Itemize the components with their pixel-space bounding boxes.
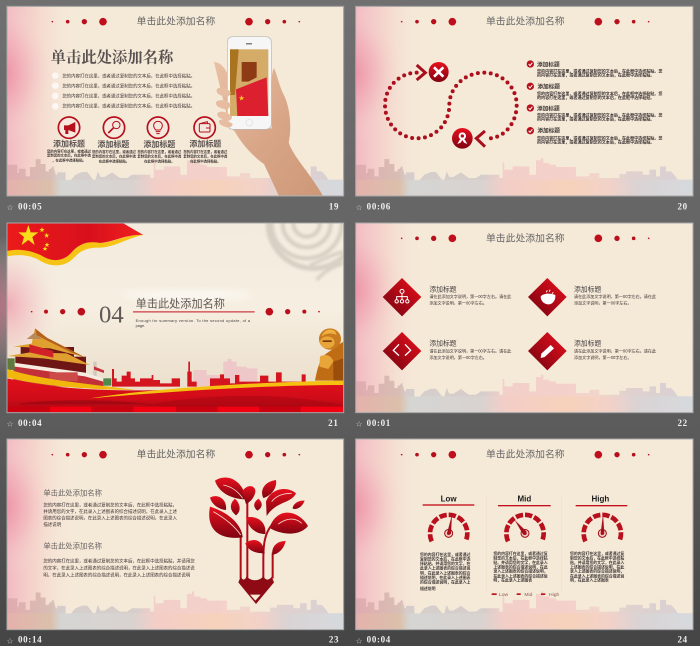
gauge column: mid: 录入上述图表的综合描述说明， xyxy=(493,569,548,574)
icon: megaphone xyxy=(58,117,80,138)
gauge column: mid: 您的内容打在这里，或者通过复 xyxy=(493,551,548,556)
text block 2: 您的内容打在这里，或者通过复制您的文本后，在此框中选择粘贴，并请用您 xyxy=(43,558,195,565)
feature column 2: 添加标题 xyxy=(97,139,129,149)
slide title: 单击此处添加名称 xyxy=(137,448,215,461)
feature: code: 请在此添加文字说明，第一00字左右。请在此 xyxy=(429,347,511,353)
red ribbons xyxy=(7,369,343,412)
slide frame xyxy=(7,223,344,413)
gauge column: high: 在此录入上述图表的综合描述说 xyxy=(570,573,624,578)
slide frame xyxy=(7,6,344,196)
footer timer: 00:05 xyxy=(18,201,42,211)
section subtitle xyxy=(136,319,251,328)
checklist: 您的内容打在这里，或者通过复制您的文本后，在此框中选择粘贴。 xyxy=(62,72,195,79)
footer timer: ☆ xyxy=(7,636,14,645)
icon: tools circle xyxy=(429,62,449,82)
feature column 3: 您的内容打在这里，或者通过 xyxy=(137,149,182,154)
list item 3: 您的内容打在这里，或者通过复制您的文本后，在此框中选择粘贴。您 xyxy=(537,112,662,118)
feature column 2: 复制您的文本后，在此框中选 xyxy=(92,153,137,158)
gauge column: high: 上述图表的综合描述说明，在此 xyxy=(570,564,624,569)
slide number: 20 xyxy=(677,201,688,211)
slide title: 单击此处添加名称 xyxy=(137,15,215,28)
feature column 2: 您的内容打在这里，或者通过 xyxy=(92,149,137,154)
checklist: 您的内容打在这里，或者通过复制您的文本后，在此框中选择粘贴。 xyxy=(62,103,195,110)
feature column 1: ，在此框中选择粘贴。 xyxy=(52,157,86,162)
icon: magnifier xyxy=(103,117,125,138)
slide header dots xyxy=(401,18,649,25)
hand holding phone xyxy=(214,37,323,195)
gauge column: high: 您的内容打在这里，或者通过复 xyxy=(570,551,624,556)
list item 1: 的内容打在这里，或者通过复制您的文本后，在此框中选择粘贴。 xyxy=(537,72,654,78)
legend: Low xyxy=(499,592,509,598)
text block 1: 您的内容打在这里，或者通过复制您的文本后，在此框中选择粘贴， xyxy=(43,501,177,508)
slide 22: diamond features xyxy=(293,220,693,429)
gauge column: low: 描述说明 xyxy=(420,586,436,591)
footer timer: 00:06 xyxy=(367,201,391,211)
slide frame xyxy=(7,439,344,630)
feature: code: 添加标题 xyxy=(429,338,457,347)
feature column 3: 在此框中选择粘贴。 xyxy=(144,159,175,164)
slide number: 21 xyxy=(328,418,338,428)
slide 20: dotted loop with list xyxy=(293,3,693,212)
Tiananmen gate xyxy=(7,328,111,387)
pencil tree icon xyxy=(209,477,308,604)
ornamental gray swirl xyxy=(265,224,343,281)
gauge column: high xyxy=(570,495,627,583)
checklist: 您的内容打在这里，或者通过复制您的文本后，在此框中选择粘贴。 xyxy=(62,82,195,89)
gauge column: high: 贴。并请用您的文字，在此录入 xyxy=(570,560,624,565)
feature column 3: 复制您的文本后，在此框中选 xyxy=(137,153,182,158)
section number: 04 xyxy=(99,301,124,328)
slide 21: section divider xyxy=(0,222,344,426)
text block 2: 明，在此录入上述图表的综合描述说明，在此录入上述图表的综合描述说明 xyxy=(43,571,191,578)
gauge column: high: 制您的文本后，在此框中选择粘 xyxy=(570,555,624,560)
feature: bell: 添加标题 xyxy=(574,284,601,293)
list item 3 xyxy=(527,104,662,122)
text block 1: 描述说明 xyxy=(43,521,62,528)
checklist: 您的内容打在这里，或者通过复制您的文本后，在此框中选择粘贴。 xyxy=(62,92,195,99)
feature column 1: 您的内容打在这里，或者通过 xyxy=(47,148,92,153)
phone body xyxy=(227,37,271,129)
list item 1 xyxy=(527,60,662,78)
slide background xyxy=(0,436,343,629)
slide number: 19 xyxy=(329,201,339,211)
gauge column: low: 复制您的文本后，在此框中选 xyxy=(420,557,470,562)
gauge column: mid xyxy=(493,495,551,583)
feature column 4: 在此框中选择粘贴。 xyxy=(190,159,221,164)
list item 4 xyxy=(527,127,662,144)
gauge column: low: 此录入上述图表的综合描述说 xyxy=(420,566,470,571)
feature column 4: 添加标题 xyxy=(189,138,221,148)
section subtitle: page. xyxy=(136,324,145,328)
pencil tip xyxy=(238,576,274,604)
feature: hierarchy: 添加标题 xyxy=(429,284,457,293)
slide background xyxy=(0,3,343,196)
feature column 1 xyxy=(47,138,92,162)
slide header dots xyxy=(51,18,300,25)
gauge column: low: 的综合描述说明，在此录入上 xyxy=(420,580,470,585)
leaf veins xyxy=(213,485,302,535)
list item 4: 的内容打在这里，或者通过复制您的文本后，在此框中选择粘贴。 xyxy=(537,138,654,144)
footer timer xyxy=(356,201,391,212)
arrow: bottom chevron xyxy=(476,131,485,147)
text block 1: 图表的综合描述说明，在此录入上述图表的综合描述说明，在此录入 xyxy=(43,515,177,522)
feature: code xyxy=(383,332,511,370)
feature: pencil: 请在此添加文字说明，第一00字左右。请在此 xyxy=(574,347,656,353)
list item 2: 您的内容打在这里，或者通过复制您的文本后，在此框中选择粘贴。您 xyxy=(537,90,662,96)
feature column 1: 复制您的文本后，在此框中选 xyxy=(47,153,92,158)
feature column 3 xyxy=(137,139,182,164)
footer timer: 00:04 xyxy=(18,418,42,428)
gauge column: low: 择粘贴。并请用您的文字，在 xyxy=(420,561,470,566)
text block 1: 并请用您的文字，在此录入上述图表的综合描述说明，在此录入上述 xyxy=(43,508,177,515)
legend: Mid xyxy=(524,592,533,598)
gauge column: mid: 贴。并请用您的文字，在此录入 xyxy=(493,560,548,565)
feature: code: 添加文字说明，第一00字左右。 xyxy=(429,354,487,360)
gauge column: low: 您的内容打在这里，或者通过 xyxy=(420,552,470,557)
pale skyline xyxy=(193,359,257,387)
gauge column: mid: 明，在此录入上述图表 xyxy=(493,578,532,583)
feature column 3: 添加标题 xyxy=(143,139,175,149)
slide title: 单击此处添加名称 xyxy=(486,231,565,244)
gauge column: high: 明，在此录入上述图表 xyxy=(570,578,609,583)
slide number: 23 xyxy=(329,635,339,645)
footer timer: 00:14 xyxy=(18,635,42,645)
title underline xyxy=(133,311,255,313)
icon: award circle xyxy=(452,128,473,149)
slide background xyxy=(293,220,693,412)
heading: 单击此处添加名称 xyxy=(51,49,175,67)
slide 24: gauges xyxy=(293,436,693,645)
legend: High xyxy=(549,592,559,598)
slide number: 22 xyxy=(677,418,688,428)
gauge column: high: 录入上述图表的综合描述说明， xyxy=(570,569,624,574)
lion statue xyxy=(315,328,343,381)
list item 3: 添加标题 xyxy=(537,104,560,112)
feature column 2 xyxy=(92,139,137,164)
feature: bell: 请在此添加文字说明，第一00字左右。请在此 xyxy=(574,293,656,299)
slide header dots xyxy=(51,451,300,458)
stems xyxy=(241,497,273,578)
list item 2: 的内容打在这里，或者通过复制您的文本后，在此框中选择粘贴。 xyxy=(537,94,654,100)
section title: 单击此处添加名称 xyxy=(136,296,225,310)
feature: hierarchy xyxy=(383,278,511,316)
feature: pencil: 添加标题 xyxy=(574,338,601,347)
footer timer: ☆ xyxy=(7,420,14,429)
checklist xyxy=(52,72,195,110)
icon: wallet xyxy=(194,117,215,138)
feature: bell: 添加文字说明，第一00字左右。 xyxy=(574,300,632,306)
footer timer: 00:04 xyxy=(367,635,391,645)
gauge column: mid: 在此录入上述图表的综合描述说 xyxy=(493,573,548,578)
footer timer xyxy=(7,635,42,645)
feature column 4: 您的内容打在这里，或者通过 xyxy=(183,149,228,154)
feature column 4: 复制您的文本后，在此框中选 xyxy=(183,153,228,158)
text block 2: 的文字，在此录入上述图表的综合描述说明，在此录入上述图表的综合描述说 xyxy=(43,565,195,572)
bottom striped band xyxy=(7,407,343,412)
list item 4: 添加标题 xyxy=(537,127,560,135)
text block 2 xyxy=(43,542,195,578)
text block 2: 单击此处添加名称 xyxy=(43,542,103,551)
flag xyxy=(7,223,143,265)
slide title: 单击此处添加名称 xyxy=(486,448,565,461)
list item 1: 添加标题 xyxy=(537,60,560,68)
feature: hierarchy: 请在此添加文字说明，第一00字左右。请在此 xyxy=(429,293,511,299)
pencil lead notch xyxy=(250,595,261,601)
gauge column: high: High xyxy=(591,495,609,504)
footer timer: ☆ xyxy=(356,203,363,212)
list item 3: 的内容打在这里，或者通过复制您的文本后，在此框中选择粘贴。 xyxy=(537,116,654,122)
footer timer xyxy=(7,418,42,429)
footer timer: 00:01 xyxy=(367,418,391,428)
gauge column: low: 描述说明，在此录入上述图表 xyxy=(420,575,470,580)
flag stars xyxy=(18,225,49,251)
gauge column: mid: 制您的文本后，在此框中选择粘 xyxy=(493,555,548,560)
column dividers xyxy=(487,495,562,593)
slide number: 24 xyxy=(677,635,688,645)
slide frame xyxy=(356,6,693,196)
feature column 4 xyxy=(183,138,228,164)
legend xyxy=(492,592,559,598)
gauge column: mid: Mid xyxy=(517,495,531,504)
slide background xyxy=(0,223,343,412)
slide header dots xyxy=(401,234,649,242)
feature: pencil: 添加文字说明，第一00字左右。 xyxy=(574,354,632,360)
gauge column: low: 明，在此录入上述图表的综合 xyxy=(420,570,470,575)
list item 2: 添加标题 xyxy=(537,83,560,91)
list item 2 xyxy=(527,83,662,100)
gauge column: mid: 上述图表的综合描述说明，在此 xyxy=(493,564,548,569)
feature column 1: 添加标题 xyxy=(53,138,85,148)
text block 1 xyxy=(43,488,177,528)
list item 1: 您的内容打在这里，或者通过复制您的文本后，在此框中选择粘贴。您 xyxy=(537,67,662,73)
footer timer xyxy=(7,201,42,212)
feature: hierarchy: 添加文字说明，第一00字左右。 xyxy=(429,300,487,306)
gauge column: low xyxy=(420,495,474,591)
section subtitle: Enough for summary version. To the second update, of a xyxy=(136,319,251,323)
red skyline xyxy=(112,362,306,387)
icon: light bulb xyxy=(147,117,169,138)
slide 23: pencil tree xyxy=(0,436,344,645)
feature: pencil xyxy=(528,332,656,370)
gauge column: low: Low xyxy=(441,495,457,504)
slide frame xyxy=(356,439,693,630)
feature: bell xyxy=(528,278,656,316)
dotted loop path xyxy=(385,73,517,138)
slide title: 单击此处添加名称 xyxy=(486,15,565,28)
leaves xyxy=(209,477,308,555)
slide background xyxy=(293,3,693,196)
footer timer: ☆ xyxy=(7,203,14,212)
text block 1: 单击此处添加名称 xyxy=(43,488,103,497)
arrow: top chevron xyxy=(417,65,425,80)
section dots xyxy=(31,308,320,315)
footer timer xyxy=(356,635,391,645)
slide background xyxy=(293,436,693,629)
slide 19: phone in hand xyxy=(0,3,344,212)
footer timer xyxy=(356,418,391,429)
feature column 2: 在此框中选择粘贴。 xyxy=(99,159,129,164)
footer timer: ☆ xyxy=(356,636,363,645)
slide header dots xyxy=(401,451,649,458)
list item 4: 您的内容打在这里，或者通过复制您的文本后，在此框中选择粘贴。您 xyxy=(537,134,662,140)
footer timer: ☆ xyxy=(356,420,363,429)
slide frame xyxy=(356,223,693,413)
